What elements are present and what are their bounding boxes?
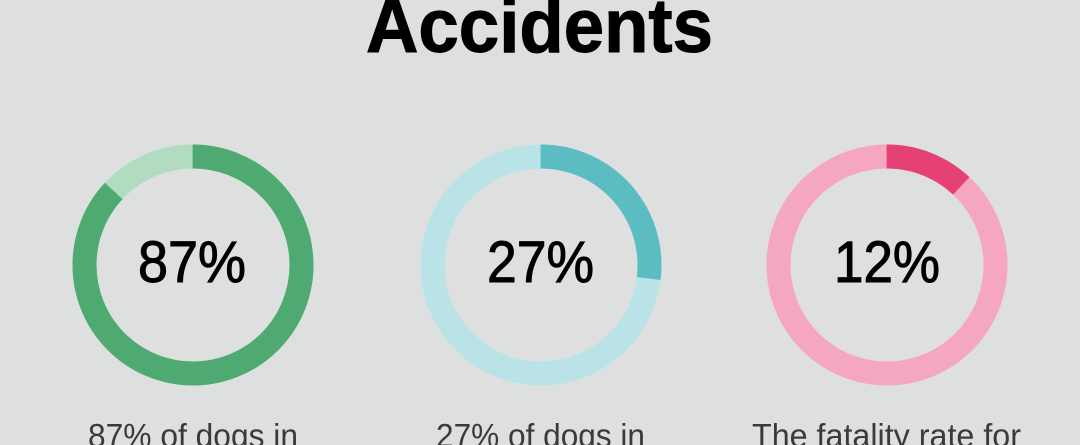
panel: 87% of dogs (84, 156, 302, 445)
panel: 27% of dogs (432, 156, 650, 445)
donut chart: 87% (84, 156, 302, 374)
value: 87%: 87% (138, 230, 246, 295)
panel: fatality rate (752, 156, 1021, 445)
value: 12%: 12% (834, 230, 940, 295)
donut chart: 27% (432, 156, 650, 374)
value: 27%: 27% (487, 230, 594, 295)
donut chart: 12% (778, 156, 996, 374)
